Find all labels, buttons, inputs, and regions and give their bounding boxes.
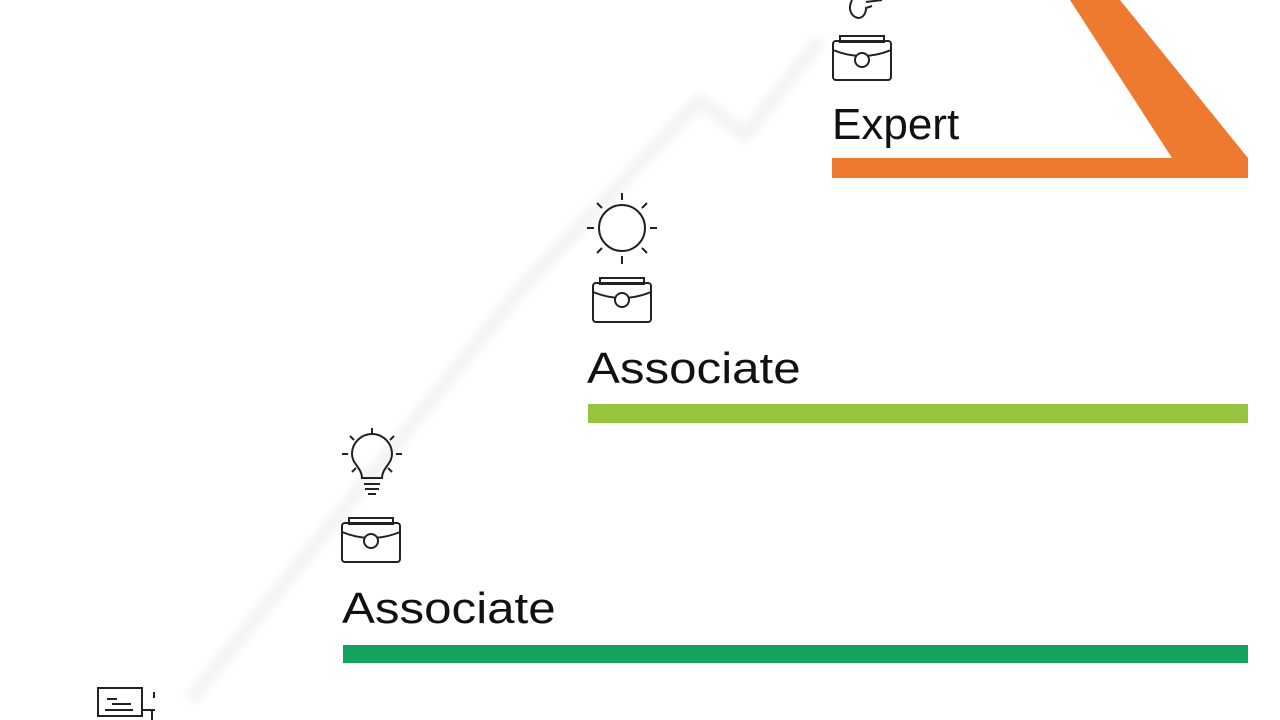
lime green bar: [588, 404, 1248, 423]
icon: sun: [587, 193, 657, 264]
icon: lightbulb: [342, 428, 402, 495]
green bar: [343, 645, 1248, 663]
icon: briefcase bottom: [341, 517, 401, 563]
icon: top partial: [848, 0, 882, 19]
icon: briefcase expert: [832, 35, 892, 81]
label: Associate middle: Associate: [587, 344, 801, 393]
icon: briefcase middle: [592, 277, 652, 323]
icon: monitor bottom-left: [97, 687, 155, 720]
label: Associate bottom: Associate: [342, 584, 556, 633]
label: Expert: Expert: [832, 100, 959, 149]
